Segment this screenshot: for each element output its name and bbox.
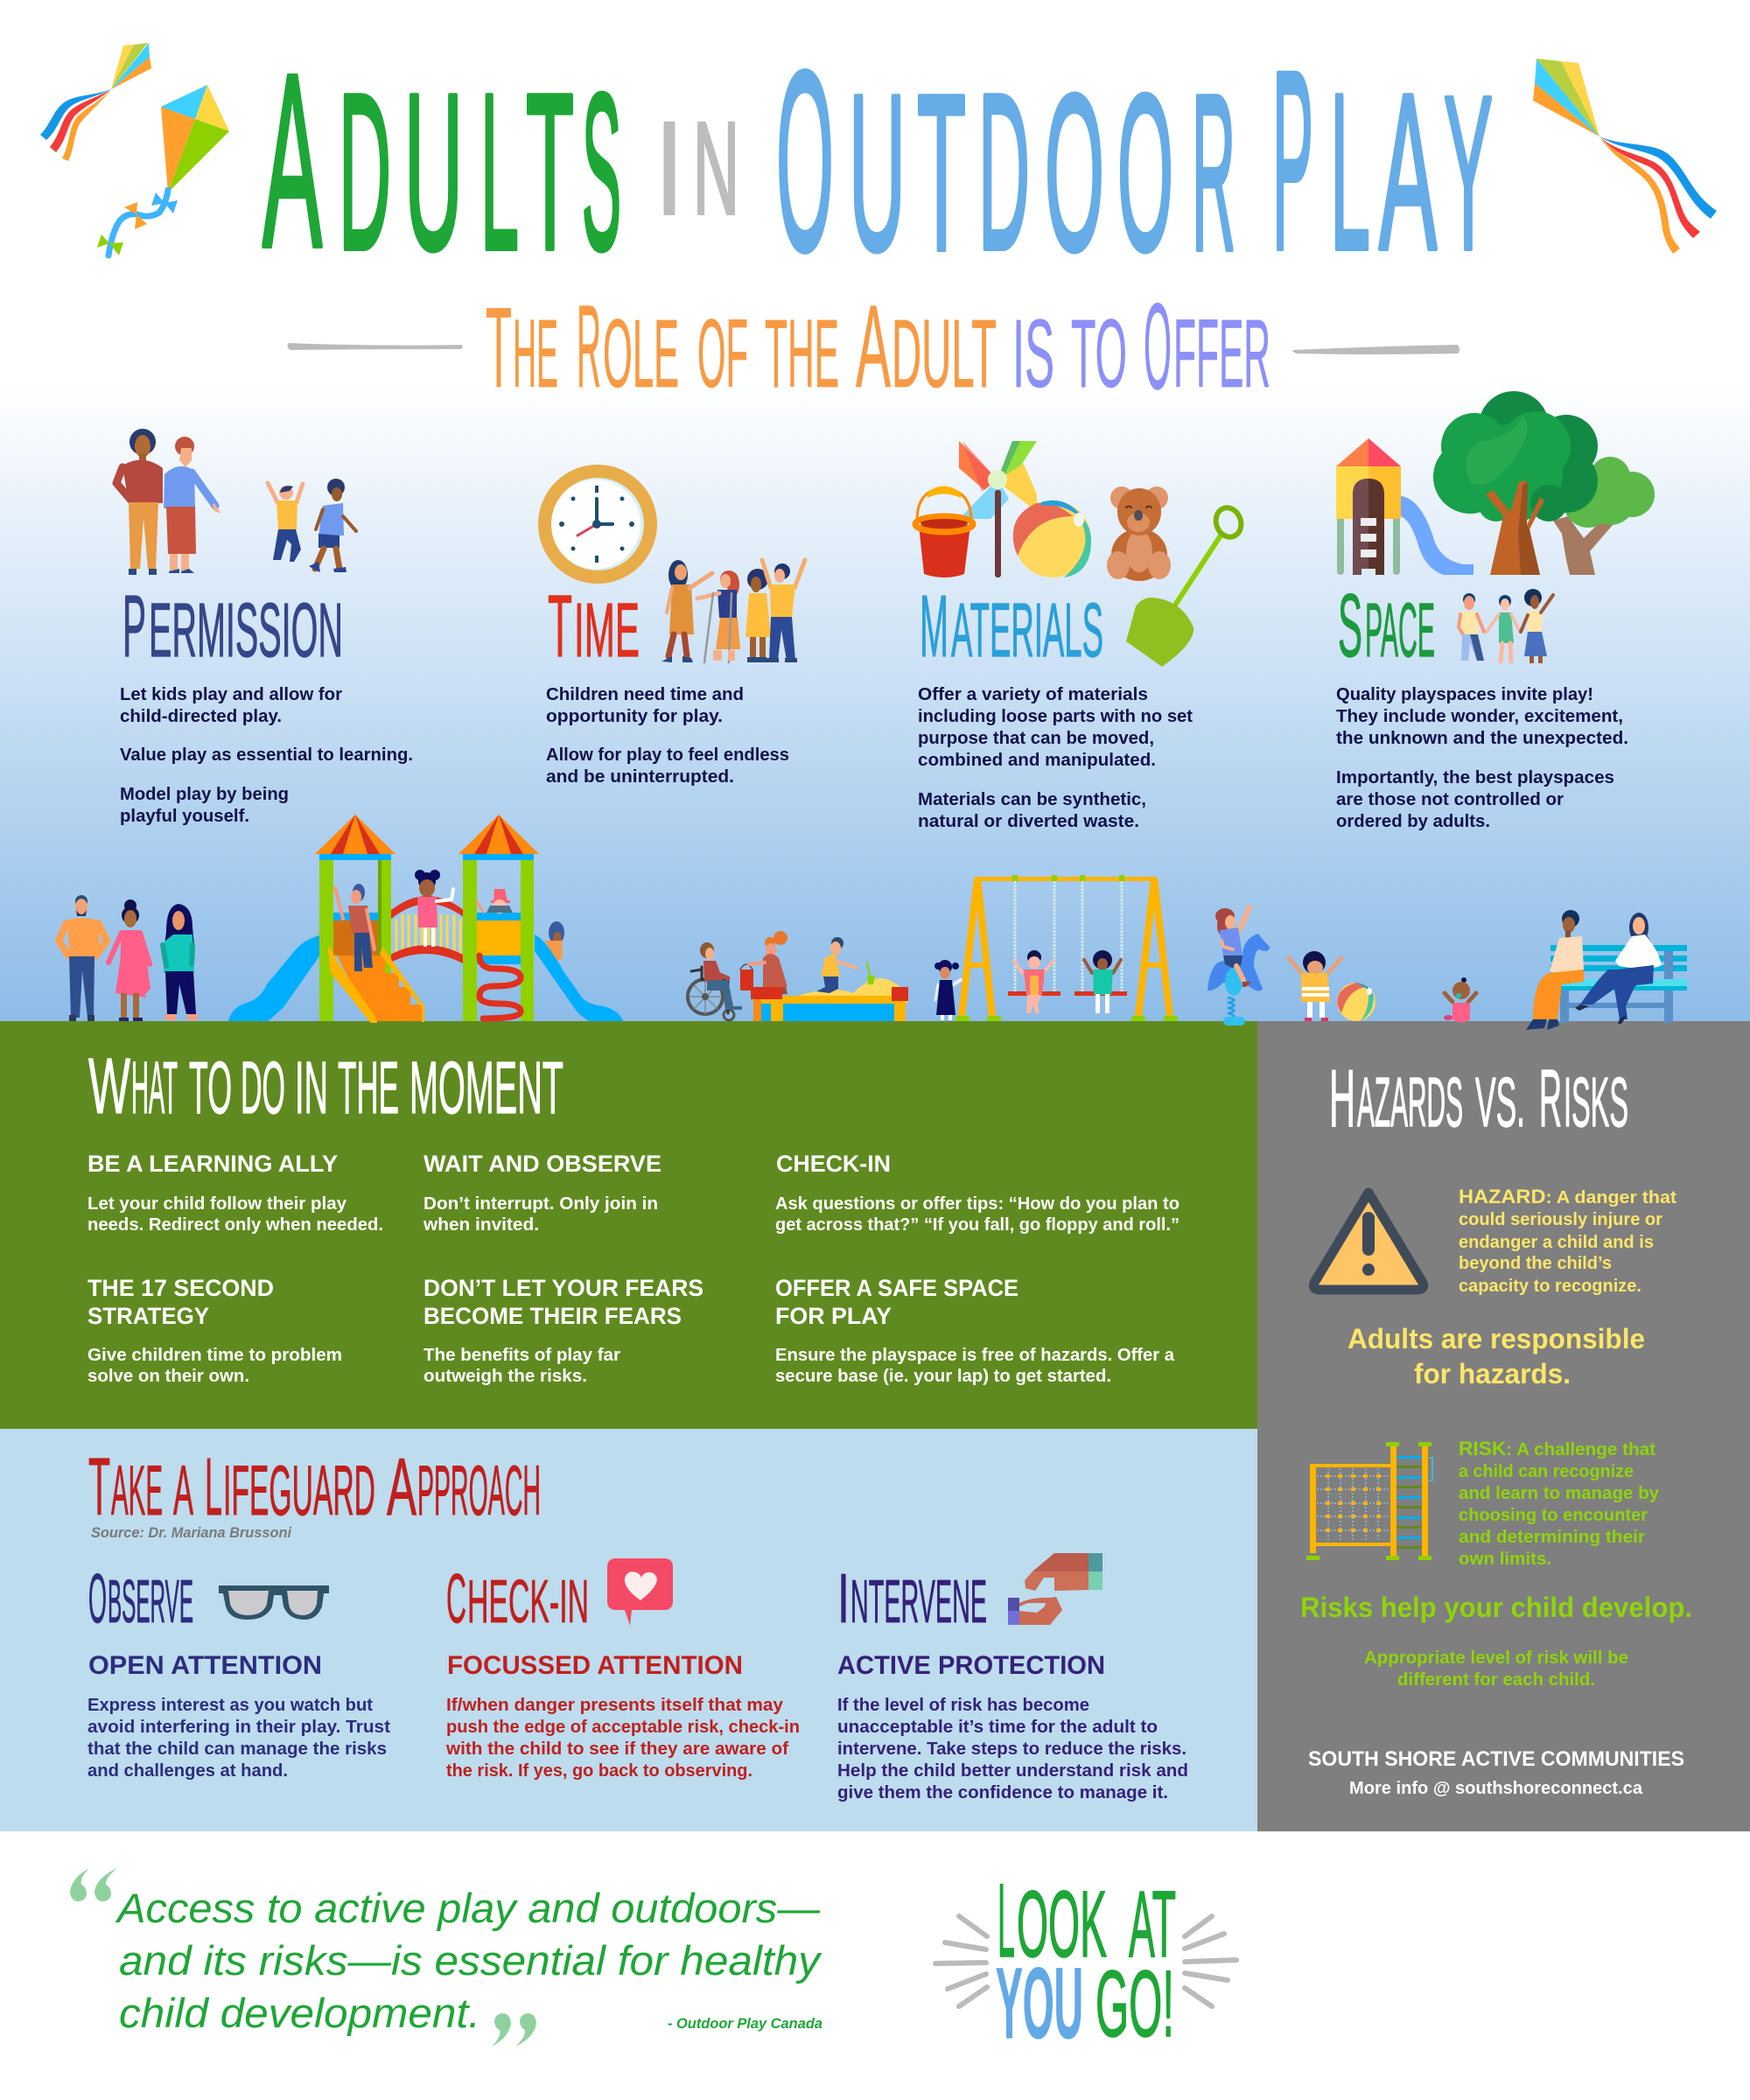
title word: Adults: A [262, 23, 322, 298]
title word: Adults: L [480, 47, 519, 296]
playground scene [59, 815, 1687, 1030]
text: intervene body: intervene. Take steps to reduce the risks. [837, 1740, 1186, 1759]
figures: baby [1444, 977, 1476, 1022]
subtitle: A [856, 282, 891, 412]
tips: row 2 headings: BECOME THEIR FEARS [424, 1303, 682, 1329]
subtitle: TO [1071, 300, 1127, 408]
tips: row 1 text: Ask questions or offer tips: “How do you plan to [775, 1194, 1180, 1214]
title word: Adults: T [526, 47, 574, 296]
tips: row 1 text: when invited. [423, 1215, 539, 1235]
text: check-in body: with the child to see if they are aware of [445, 1740, 788, 1759]
heading: materials: M [920, 578, 948, 676]
panel: materials: ATERIALS [951, 588, 1103, 673]
text: appropriate level of risk: Appropriate level of risk will be [1364, 1648, 1628, 1668]
tips: row 1 text: get across that?” “If you fall, go floppy and roll.” [775, 1215, 1180, 1235]
heading: permission [122, 578, 343, 676]
slide left [228, 934, 323, 1021]
title words: Outdoor Play: T [917, 48, 966, 297]
text: permission body: Value play as essential to learning. [120, 746, 413, 765]
panel: what to do in the moment: MOMENT [410, 1046, 564, 1129]
text: permission body [120, 685, 413, 826]
title words: Outdoor Play [776, 18, 1493, 304]
tips: row 1 headings: CHECK-IN [776, 1151, 891, 1177]
text: intervene body: Help the child better understand risk and [837, 1761, 1188, 1781]
title words: Outdoor Play: O [776, 18, 834, 304]
title words: Outdoor Play: O [1045, 48, 1104, 297]
text: permission body: Model play by being [120, 785, 289, 804]
text: observe body: that the child can manage the risks [88, 1740, 387, 1759]
text: risk definition: RISK: A challenge that [1459, 1438, 1656, 1460]
figures: child in wheelchair and sandbox [688, 931, 908, 1021]
text: intervene body: If the level of risk has become [837, 1696, 1089, 1715]
subheading: open attention: OPEN ATTENTION [88, 1651, 322, 1680]
text: observe body [88, 1696, 390, 1781]
logo text: YOU [996, 1948, 1083, 2060]
wiggle ladder [480, 956, 521, 1018]
subtitle: T [486, 284, 512, 411]
credit: south shore active communities: More info @ southshoreconnect.ca [1349, 1779, 1643, 1798]
text: check-in body: push the edge of acceptable risk, check-in [446, 1718, 800, 1737]
subtitle: THE [765, 300, 839, 408]
tips: row 1 headings: BE A LEARNING ALLY [88, 1151, 338, 1177]
text: time body: and be uninterrupted. [546, 767, 734, 787]
text: risk definition [1459, 1438, 1660, 1569]
heading: what to do in the moment: DO [241, 1046, 285, 1129]
quote text: child development. [119, 1990, 480, 2036]
text: space body: ordered by adults. [1336, 812, 1490, 831]
panel: hazards vs risks [1257, 1021, 1750, 1831]
text: intervene body: unacceptable it’s time for the adult to [837, 1718, 1158, 1737]
tips: row 2 headings: THE 17 SECOND [88, 1275, 274, 1301]
text: hazard definition [1459, 1186, 1676, 1296]
callout: risks help: Risks help your child develop. [1300, 1592, 1692, 1623]
heading: space [1338, 576, 1435, 676]
heading: what to do in the moment: W [88, 1043, 130, 1130]
heading: time [548, 578, 640, 676]
icon: clock [538, 465, 657, 584]
text: materials body: purpose that can be moved, [918, 729, 1154, 748]
text: space body: Importantly, the best playspaces [1336, 768, 1614, 788]
panel: permission: ERMISSION [149, 588, 343, 673]
icon: helping hands [1008, 1553, 1102, 1625]
title word: Adults: D [339, 47, 391, 296]
playground structure [228, 815, 623, 1022]
bridge [390, 896, 465, 964]
tips: row 2 text: outweigh the risks. [424, 1367, 587, 1386]
heading: check-in [446, 1559, 589, 1637]
title words: Outdoor Play: P [1272, 18, 1313, 303]
slide right [535, 934, 623, 1021]
icon: kite top right [1533, 59, 1717, 254]
text: risk definition: choosing to encounter [1459, 1506, 1648, 1525]
panel: time: IME [574, 588, 640, 673]
logo text [996, 1862, 1176, 2060]
credit: south shore active communities [1308, 1747, 1684, 1798]
quote text: Access to active play and outdoors— [115, 1885, 821, 1931]
icon: climbing net [1306, 1442, 1432, 1560]
quote text [115, 1885, 822, 2036]
subheading: focussed attention: FOCUSSED ATTENTION [447, 1651, 743, 1680]
text: Y [1444, 51, 1493, 295]
panel: permission [116, 429, 413, 826]
text: check-in body: the risk. If yes, go back to observing. [446, 1761, 752, 1781]
subtitle: OLE [603, 300, 679, 408]
column: check-in: HECK-IN [467, 1567, 589, 1635]
icon: heart speech bubble [607, 1558, 673, 1626]
title words: Outdoor Play: L [1330, 47, 1370, 296]
quote text: and its risks—is essential for healthy [119, 1937, 822, 1984]
icon: small kite top left [40, 43, 151, 161]
text: risk definition: and learn to manage by [1459, 1484, 1660, 1503]
text: space body: are those not controlled or [1336, 790, 1564, 809]
title word: in [656, 94, 739, 242]
panel: what to do in the moment [0, 1021, 1257, 1429]
title words: Outdoor Play: A [1379, 47, 1437, 296]
icon: bucket [915, 486, 973, 578]
icon: large kite top left [97, 85, 229, 256]
subtitle: OF [697, 300, 748, 408]
tips: row 2 headings: OFFER A SAFE SPACE [775, 1275, 1018, 1301]
figures: two adults on a bench [1526, 910, 1687, 1030]
panel: space [1336, 391, 1655, 831]
panel: lifeguard approach [0, 1429, 1257, 1831]
text: risk definition: own limits. [1459, 1550, 1551, 1569]
text: risk definition: a child can recognize [1459, 1462, 1634, 1481]
credit: south shore active communities: SOUTH SHORE ACTIVE COMMUNITIES [1308, 1747, 1684, 1771]
tips: row 2 headings: DON’T LET YOUR FEARS [424, 1275, 704, 1301]
text: hazard definition: endanger a child and is [1459, 1233, 1654, 1252]
text: observe body: and challenges at hand. [88, 1761, 288, 1781]
subtitle: FFER [1173, 300, 1270, 408]
quote attribution: - Outdoor Play Canada [668, 2015, 822, 2032]
heading: what to do in the moment: TO [189, 1046, 232, 1129]
tips: row 2 headings [88, 1275, 1018, 1329]
heading: hazards vs risks: H [1329, 1053, 1355, 1144]
column: observe: BSERVE [108, 1567, 193, 1635]
text: time body: Children need time and [546, 685, 744, 704]
tips: row 2 text: Ensure the playspace is free of hazards. Offer a [775, 1346, 1175, 1365]
text: space body: the unknown and the unexpected. [1336, 729, 1628, 748]
source note: Source: Dr. Mariana Brussoni [91, 1524, 292, 1541]
heading: hazards vs risks: VS. [1475, 1063, 1525, 1141]
icon: shovel [1126, 504, 1245, 667]
text: appropriate level of risk: different for each child. [1397, 1670, 1595, 1690]
figures: three adults [59, 895, 198, 1021]
text: materials body: combined and manipulated. [918, 751, 1156, 770]
heading: what to do in the moment [88, 1043, 564, 1130]
text: materials body [918, 685, 1193, 831]
heading: hazards vs risks: AZARDS [1357, 1063, 1463, 1141]
text: hazard definition: beyond the child’s [1459, 1254, 1612, 1273]
title word: in: I [656, 94, 682, 242]
text: permission body: child-directed play. [120, 707, 282, 726]
tips: row 2 headings: FOR PLAY [775, 1303, 892, 1329]
text: materials body: natural or diverted waste. [918, 812, 1139, 831]
quote [70, 1868, 822, 2047]
heading: space: S [1338, 576, 1362, 676]
title [262, 18, 1493, 304]
text: time body: Allow for play to feel endless [546, 746, 789, 765]
tips: row 2 text: secure base (ie. your lap) to get started. [775, 1367, 1111, 1386]
tower walls [333, 913, 523, 964]
subheading: active protection: ACTIVE PROTECTION [837, 1651, 1105, 1680]
text: risk definition: and determining their [1459, 1528, 1645, 1547]
text: hazard definition: HAZARD : A danger that [1459, 1186, 1676, 1208]
subtitle: R [577, 282, 601, 412]
text: materials body: Materials can be synthetic, [918, 790, 1146, 809]
icon: adults and children playing [116, 429, 356, 575]
text: materials body: including loose parts with no set [918, 707, 1193, 726]
title: S [582, 47, 621, 296]
title words: Outdoor Play: U [849, 48, 906, 297]
text: space body [1336, 685, 1628, 831]
logo: look at you go: GO! [1096, 1950, 1174, 2056]
heading: what to do in the moment: THE [338, 1046, 399, 1129]
icon: glasses [219, 1586, 329, 1620]
roofs [315, 815, 539, 860]
heading: hazards vs risks: R [1539, 1053, 1562, 1144]
column: intervene [837, 1553, 1188, 1802]
text: hazard definition: could seriously injure or [1459, 1210, 1662, 1229]
tips: row 1 text: Let your child follow their play [88, 1194, 347, 1214]
icon: pinwheel [959, 441, 1037, 578]
tips: row 1 text: Don’t interrupt. Only join in [424, 1194, 658, 1214]
heading: observe [88, 1559, 193, 1637]
icon: warning triangle [1313, 1193, 1424, 1290]
heading: take a lifeguard approach: A [387, 1441, 416, 1532]
title words: Outdoor Play: D [978, 47, 1030, 296]
subtitle [287, 277, 1460, 415]
icon: three children holding hands [1459, 589, 1553, 663]
title: N [693, 94, 739, 242]
callout: adults responsible: for hazards. [1414, 1358, 1571, 1390]
text: observe body: avoid interfering in their play. Trust [88, 1718, 390, 1737]
quote mark: opening [70, 1868, 117, 1901]
title word: Adults [262, 23, 621, 298]
quote mark: closing [492, 2013, 536, 2047]
icon: beach ball [1013, 500, 1091, 578]
tips: row 1 text [88, 1194, 1180, 1235]
text: appropriate level of risk [1364, 1648, 1628, 1690]
icon: teddy bear [1107, 486, 1171, 581]
text: check-in body: If/when danger presents itself that may [446, 1696, 784, 1715]
subtitle: DULT [892, 300, 997, 408]
callout: adults responsible [1348, 1323, 1645, 1390]
heading: take a lifeguard approach [88, 1441, 541, 1532]
subtitle: IS [1012, 300, 1054, 408]
logo text: OOK [1017, 1871, 1107, 1977]
heading: check-in: C [446, 1559, 466, 1637]
logo text: L [998, 1862, 1015, 1979]
heading: take a lifeguard approach: AKE [111, 1452, 163, 1530]
heading: intervene: I [837, 1559, 850, 1637]
text: observe body: Express interest as you watch but [88, 1696, 373, 1715]
posts [319, 860, 534, 1021]
figures: cheering girl and ball [1289, 951, 1376, 1021]
heading: what to do in the moment: IN [295, 1046, 328, 1129]
column: observe [88, 1559, 390, 1781]
logo: look at you go [935, 1862, 1236, 2060]
title word: Adults: U [404, 47, 463, 296]
heading: time: T [548, 578, 572, 676]
text: time body [546, 685, 789, 787]
tips: row 2 text [88, 1346, 1175, 1386]
tips: row 1 headings: WAIT AND OBSERVE [424, 1151, 662, 1177]
heading: observe: O [88, 1559, 107, 1637]
panel: hazards vs risks: ISKS [1564, 1063, 1628, 1141]
panel: space: PACE [1365, 588, 1435, 673]
heading: take a lifeguard approach: A [173, 1452, 193, 1530]
figures: spring rider [1208, 907, 1270, 1026]
children on playground [335, 870, 564, 971]
icon: children group [662, 560, 805, 662]
text: permission body: playful youself. [120, 807, 249, 826]
column: check-in [445, 1558, 800, 1781]
logo: look at you go: AT [1129, 1871, 1176, 1977]
heading: what to do in the moment: HAT [131, 1046, 178, 1129]
panel: materials [915, 441, 1245, 831]
tips: row 2 text: solve on their own. [88, 1367, 249, 1386]
text: check-in body [445, 1696, 800, 1781]
column: intervene: NTERVENE [850, 1567, 987, 1635]
text: time body: opportunity for play. [546, 707, 723, 726]
tips: row 2 text: The benefits of play far [424, 1346, 620, 1365]
callout: adults responsible: Adults are responsible [1348, 1323, 1645, 1354]
subtitle: O [1144, 277, 1172, 415]
heading: take a lifeguard approach: L [205, 1441, 222, 1532]
title words: Outdoor Play: O [1117, 48, 1173, 297]
heading: materials [920, 578, 1103, 676]
icon: play tower and trees [1336, 391, 1655, 575]
logo rays [935, 1916, 1236, 2006]
figures: swing set [934, 875, 1178, 1021]
text: hazard definition: capacity to recognize. [1459, 1277, 1642, 1296]
tips: row 1 headings [88, 1151, 891, 1177]
text: intervene body: give them the confidence to manage it. [837, 1783, 1168, 1802]
tips: row 2 headings: STRATEGY [88, 1303, 209, 1329]
heading: take a lifeguard approach: IFEGUARD [223, 1452, 375, 1530]
title words: Outdoor Play: R [1192, 48, 1236, 297]
tips: row 2 text: Give children time to problem [88, 1346, 342, 1365]
heading: take a lifeguard approach: T [88, 1441, 110, 1532]
text: materials body: Offer a variety of materials [918, 685, 1148, 704]
heading: intervene [837, 1559, 987, 1637]
heading: permission: P [122, 578, 146, 676]
text: permission body: Let kids play and allow for [120, 685, 342, 704]
stairs [329, 947, 424, 1022]
text: space body: They include wonder, excitement, [1336, 707, 1623, 726]
panel: lifeguard approach: PPROACH [417, 1452, 541, 1530]
panel: time [538, 465, 805, 787]
tips: row 1 text: needs. Redirect only when needed. [88, 1215, 383, 1235]
text: intervene body [837, 1696, 1188, 1802]
subtitle: HE [513, 300, 558, 408]
text: space body: Quality playspaces invite play! [1336, 685, 1593, 704]
